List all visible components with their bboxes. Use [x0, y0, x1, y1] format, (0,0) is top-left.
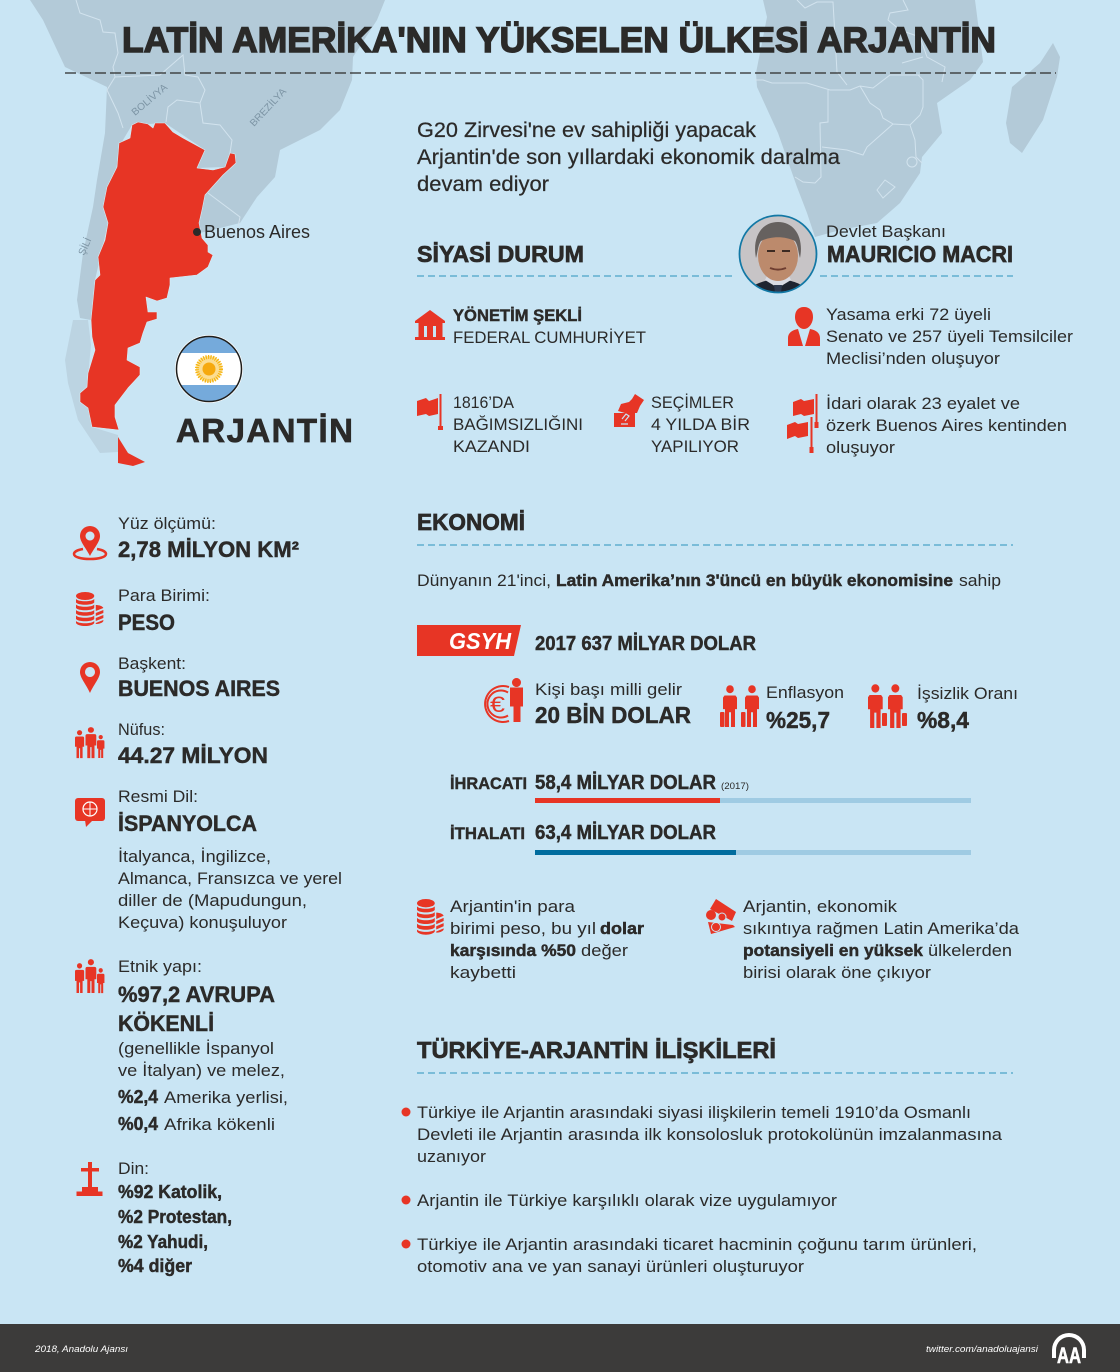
president label [820, 222, 1013, 276]
item: provinces: oluşuyor [826, 438, 895, 457]
fact: area: Yüz ölçümü: [118, 514, 216, 533]
item: legislature: Senato ve 257 üyeli Temsilciler [826, 327, 1073, 346]
GDP banner: 2017 637 MİLYAR DOLAR [535, 632, 757, 655]
item: government form: FEDERAL CUMHURİYET [453, 328, 646, 347]
stat: inflation: %25,7 [766, 707, 830, 733]
bar chart: exports [450, 771, 971, 803]
fact: ethnic groups: %2,4 [118, 1087, 158, 1107]
stat: income per capita: Kişi başı milli gelir [535, 680, 682, 699]
country name: ARJANTİN [176, 412, 353, 449]
note: potential: ülkelerden [928, 941, 1012, 960]
icon: Argentine flag [175, 335, 243, 403]
fact: capital: BUENOS AIRES [118, 676, 280, 701]
map: Argentina [80, 122, 236, 466]
capital marker: Buenos Aires: Buenos Aires [204, 222, 310, 242]
bullet: consular protocol [402, 1103, 1003, 1166]
stat: income per capita [485, 678, 691, 728]
fact: ethnic groups: (genellikle İspanyol [118, 1039, 274, 1058]
fact: language: İSPANYOLCA [118, 811, 257, 836]
stat: income per capita: 20 BİN DOLAR [535, 702, 691, 728]
fact: language: Almanca, Fransızca ve yerel [118, 869, 342, 888]
map: Africa and Madagascar [755, 0, 1060, 237]
map: South America [30, 0, 385, 453]
note: peso: dolar [600, 919, 644, 938]
fact: religion: %4 diğer [118, 1256, 192, 1276]
item: provinces: İdari olarak 23 eyalet ve [826, 394, 1020, 413]
bar chart: imports: 63,4 MİLYAR DOLAR [535, 821, 717, 844]
item: independence: KAZANDI [453, 437, 530, 456]
fact: capital: Başkent: [118, 654, 186, 673]
map labels: ŞİLİ [75, 235, 94, 257]
title rule [65, 72, 1056, 74]
fact: religion: Din: [118, 1159, 149, 1178]
title: LATİN AMERİKA'NIN YÜKSELEN ÜLKESİ ARJANTİN [122, 21, 996, 60]
fact: religion: %92 Katolik, [118, 1182, 222, 1202]
stat: unemployment: İşsizlik Oranı [917, 684, 1018, 703]
section heading: Türkiye-Arjantin: TÜRKİYE-ARJANTİN İLİŞKİLERİ [417, 1037, 776, 1063]
bullet: trade [402, 1235, 977, 1276]
item: independence [417, 393, 583, 456]
fact: ethnic groups: Amerika yerlisi, [164, 1088, 288, 1107]
bullet: consular protocol: uzanıyor [417, 1147, 486, 1166]
bullet: trade: Türkiye ile Arjantin arasındaki ticaret hacminin çoğunu tarım ürünleri, [417, 1235, 977, 1254]
fact: area [74, 514, 299, 562]
bar chart: exports: İHRACATI [450, 774, 527, 793]
fact: ethnic groups: %0,4 [118, 1114, 158, 1134]
fact: ethnic groups: KÖKENLİ [118, 1011, 214, 1036]
bullet: consular protocol: Devleti ile Arjantin arasında ilk konsolosluk protokolünün imzalanmasına [417, 1125, 1003, 1144]
fact: ethnic groups: Etnik yapı: [118, 957, 202, 976]
fact: currency [76, 586, 210, 635]
fact: ethnic groups: ve İtalyan) ve melez, [118, 1061, 285, 1080]
stat: inflation [720, 683, 844, 733]
note: potential: Arjantin, ekonomik [743, 897, 898, 916]
note: peso [417, 897, 644, 982]
bar chart: exports: 58,4 MİLYAR DOLAR [535, 771, 717, 794]
item: government form [415, 306, 646, 347]
facts column [74, 514, 342, 1276]
item: government form: YÖNETİM ŞEKLİ [453, 306, 582, 325]
fact: population: Nüfus: [118, 720, 165, 739]
item: elections [614, 393, 750, 456]
item: elections: YAPILIYOR [651, 437, 739, 456]
intro text: G20 Zirvesi'ne ev sahipliği yapacak [417, 119, 757, 142]
item: elections: 4 YILDA BİR [651, 415, 750, 434]
icon: AA logo: AA [1057, 1343, 1081, 1368]
footer: twitter.com/anadoluajansi [926, 1344, 1039, 1355]
bar chart: imports [450, 821, 971, 855]
fact: language: İtalyanca, İngilizce, [118, 847, 271, 866]
fact: population [75, 720, 268, 768]
fact: religion [76, 1159, 232, 1276]
fact: currency: PESO [118, 610, 175, 635]
note: peso: değer [581, 941, 628, 960]
item: independence: 1816’DA [453, 393, 515, 412]
item: legislature: Yasama erki 72 üyeli [826, 305, 991, 324]
fact: religion: %2 Protestan, [118, 1207, 232, 1227]
fact: currency: Para Birimi: [118, 586, 210, 605]
bullet: trade: otomotiv ana ve yan sanayi ürünleri oluşturuyor [417, 1257, 804, 1276]
note: peso: kaybetti [450, 963, 516, 982]
map labels [75, 80, 289, 257]
fact: population: 44.27 MİLYON [118, 743, 268, 768]
item: elections: SEÇİMLER [651, 393, 734, 412]
icon: AA logo [1052, 1333, 1086, 1368]
bar chart: imports: İTHALATI [450, 824, 525, 843]
fact: ethnic groups: Afrika kökenli [164, 1115, 275, 1134]
president label: MAURICIO MACRI [827, 241, 1013, 267]
note: peso: birimi peso, bu yıl [450, 919, 596, 938]
economy summary: Dünyanın 21'inci, [417, 571, 551, 590]
fact: area: 2,78 MİLYON KM² [118, 537, 299, 562]
economy summary: Latin Amerika’nın 3'üncü en büyük ekonomisine [556, 571, 953, 590]
item: legislature [788, 305, 1073, 368]
footer: 2018, Anadolu Ajansı [34, 1344, 128, 1355]
stat: income per capita: € [490, 692, 505, 717]
fact: ethnic groups: %97,2 AVRUPA [118, 982, 275, 1007]
fact: language [75, 787, 342, 932]
stat: inflation: Enflasyon [766, 683, 844, 702]
note: peso: Arjantin'in para [450, 897, 576, 916]
intro text: Arjantin'de son yıllardaki ekonomik daralma [417, 146, 840, 169]
bar chart: exports: (2017) [721, 781, 749, 791]
note: potential: potansiyeli en yüksek [743, 941, 924, 960]
section heading: Ekonomi: EKONOMİ [417, 509, 525, 535]
item: independence: BAĞIMSIZLIĞINI [453, 415, 583, 434]
president label: Devlet Başkanı [826, 222, 946, 241]
fact: religion: %2 Yahudi, [118, 1232, 208, 1252]
note: potential: sıkıntıya rağmen Latin Amerika’da [743, 919, 1020, 938]
item: provinces: özerk Buenos Aires kentinden [826, 416, 1067, 435]
intro text: devam ediyor [417, 173, 549, 196]
fact: language: diller de (Mapudungun, [118, 891, 307, 910]
stat: unemployment [868, 684, 1018, 733]
fact: language: Keçuva) konuşuluyor [118, 913, 287, 932]
stat: unemployment: %8,4 [917, 707, 969, 733]
note: potential [706, 897, 1020, 982]
fact: language: Resmi Dil: [118, 787, 198, 806]
bullet: visa: Arjantin ile Türkiye karşılıklı olarak vize uygulamıyor [417, 1191, 837, 1210]
bullet: consular protocol: Türkiye ile Arjantin arasındaki siyasi ilişkilerin temeli 1910’da Osmanlı [417, 1103, 971, 1122]
note: potential: birisi olarak öne çıkıyor [743, 963, 931, 982]
fact: capital [80, 654, 280, 701]
item: legislature: Meclisi’nden oluşuyor [826, 349, 1000, 368]
map labels: BOLİVYA [129, 80, 170, 118]
footer [0, 1324, 1120, 1372]
note: peso: karşısında %50 [450, 941, 576, 960]
economy summary [417, 571, 1001, 590]
item: provinces [787, 394, 1067, 457]
section heading: Siyasi Durum: SİYASİ DURUM [417, 241, 584, 267]
map labels: BREZİLYA [247, 85, 289, 129]
intro text [417, 119, 840, 196]
economy summary: sahip [959, 571, 1001, 590]
GDP banner: GSYH [449, 628, 511, 654]
GDP banner [417, 625, 757, 656]
portrait: Mauricio Macri [740, 216, 816, 296]
fact: ethnic groups [75, 957, 288, 1134]
